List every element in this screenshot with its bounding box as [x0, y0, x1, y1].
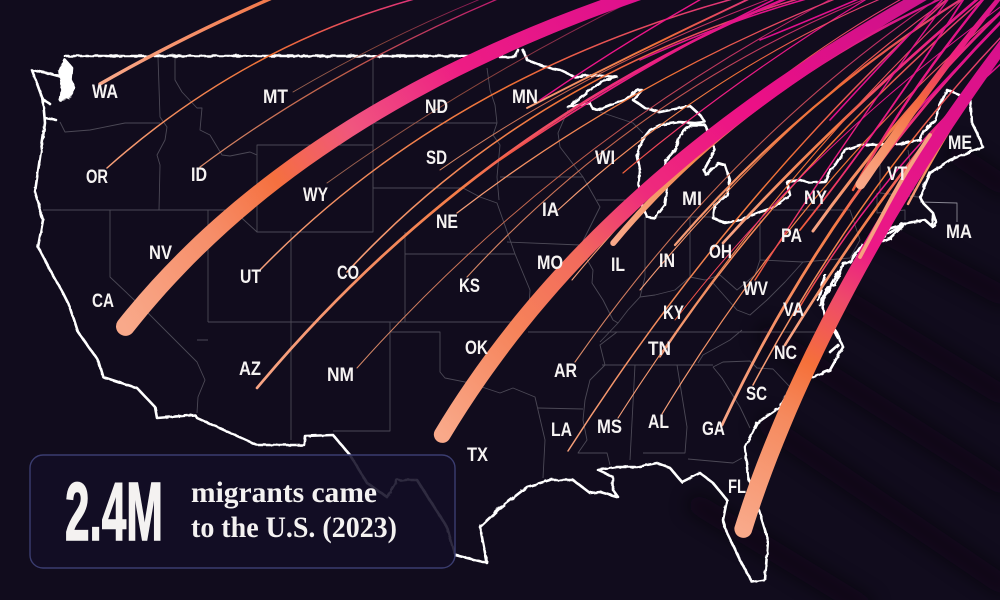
arc: MA [908, 45, 1000, 204]
label: ME: ME [948, 133, 972, 154]
map: state borders [43, 57, 957, 478]
label: MN: MN [512, 87, 538, 108]
arc: pink A [500, 0, 773, 160]
arc: ND [423, 0, 640, 90]
label: NY: NY [804, 188, 827, 209]
description text: to the U.S. (2023) [191, 511, 397, 544]
label: TN: TN [648, 339, 671, 360]
label: WI: WI [595, 148, 615, 169]
arc: TX, thick [434, 0, 963, 443]
arc: MI [675, 0, 965, 245]
label: NC: NC [774, 343, 797, 364]
arc: OR [107, 0, 418, 168]
label: AR: AR [554, 361, 577, 382]
label: WV: WV [743, 279, 768, 300]
description text: migrants came [191, 476, 377, 509]
label: LA: LA [551, 420, 572, 441]
arc: pink E [830, 0, 945, 120]
label: ND: ND [425, 97, 448, 118]
arc: FL, thick [734, 7, 1000, 538]
label: FL: FL [728, 477, 746, 498]
arc: LA [568, 0, 950, 451]
label: MS: MS [597, 417, 622, 438]
arc: TN [660, 0, 985, 357]
arc: WY [327, 0, 640, 183]
arc: AR [575, 0, 940, 362]
arc: IL [610, 0, 945, 246]
arc: NE [457, 0, 840, 213]
arc: NC [785, 50, 1000, 345]
arc: MS [618, 0, 965, 418]
arc: pink B [540, 0, 703, 100]
arc: MN [527, 0, 753, 108]
label: WA: WA [92, 82, 118, 103]
label: MO: MO [537, 253, 563, 274]
label: OH: OH [709, 242, 732, 263]
arc: IN [640, 0, 950, 290]
arc: WV [755, 0, 950, 280]
arc: SC [753, 35, 1000, 385]
label: IN: IN [659, 251, 675, 272]
state labels [86, 82, 972, 498]
label: KY: KY [663, 303, 684, 324]
label: GA: GA [702, 419, 725, 440]
arc: AL [662, 10, 1000, 414]
label: CA: CA [92, 291, 114, 312]
arc: GA [722, 20, 1000, 425]
label: NE: NE [436, 212, 458, 233]
arc: VA [795, 62, 1000, 315]
arc: pink F [880, 20, 1000, 150]
arc: CT [853, 0, 985, 190]
label: SC: SC [746, 384, 767, 405]
arc: IA [558, 0, 885, 210]
arc: KS [467, 0, 870, 277]
thin migration arcs [100, 0, 1000, 451]
panel background [30, 455, 455, 568]
big number: 2.4M [65, 465, 163, 558]
arc: WI [623, 0, 870, 173]
label: MA: MA [946, 222, 972, 243]
label: MT: MT [263, 87, 288, 108]
arc: CA, thick [116, 0, 652, 336]
description text [191, 476, 397, 544]
label: MI: MI [682, 189, 702, 210]
arc: AZ [257, 0, 790, 388]
arc: NY, medium [855, 0, 1000, 189]
label: AL: AL [648, 412, 669, 433]
label: OR: OR [86, 167, 108, 188]
arc: MT [293, 0, 483, 92]
arc: WA [100, 0, 272, 84]
label: PA: PA [781, 226, 802, 247]
arc: NJ, inside the FL band [860, 135, 930, 257]
label: OK: OK [465, 338, 488, 359]
label: CO: CO [337, 263, 359, 284]
arc: SD [440, 0, 775, 170]
label: IA: IA [542, 200, 559, 221]
arc: CO [347, 0, 805, 272]
callout panel: 2.4M migrants [30, 455, 455, 568]
label: IL: IL [611, 255, 625, 276]
label: NM: NM [327, 365, 354, 386]
label: NV: NV [149, 243, 172, 264]
arc: pink D [760, 0, 863, 40]
arc: NM [357, 0, 835, 368]
arc: KY [675, 5, 1000, 320]
label: UT: UT [240, 267, 261, 288]
label: AZ: AZ [239, 359, 261, 380]
arc: UT [260, 0, 740, 270]
label: TX: TX [467, 445, 488, 466]
arc: MO [572, 0, 905, 280]
arc: PA [813, 10, 1000, 231]
label: WY: WY [303, 185, 328, 206]
label: SD: SD [426, 148, 447, 169]
label: VT: VT [887, 164, 907, 185]
arc: MD [800, 0, 965, 230]
label: KS: KS [459, 276, 480, 297]
label: ID: ID [191, 165, 207, 186]
arc: OH [723, 0, 980, 243]
arc: ID [200, 0, 500, 167]
label: VA: VA [783, 300, 804, 321]
arc: pink C [640, 0, 810, 60]
